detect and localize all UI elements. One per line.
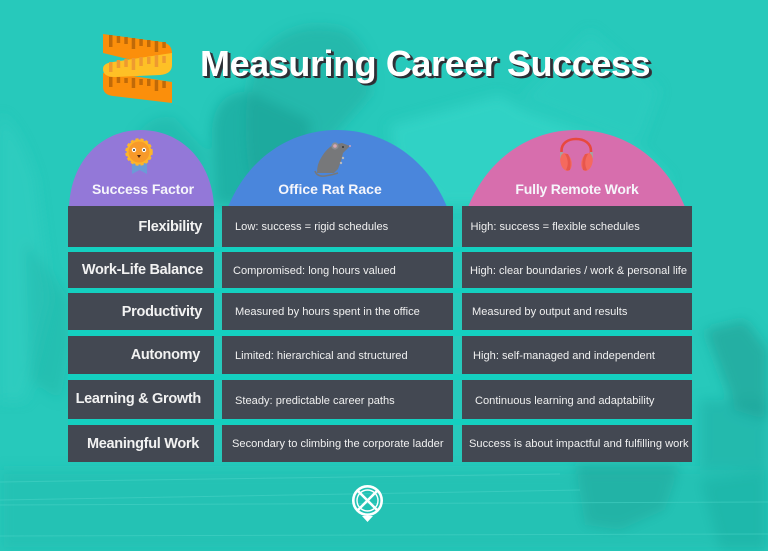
- row: meaningful work office: [222, 425, 453, 462]
- row: flexibility remote: High: success = flexible schedules: [470, 220, 640, 232]
- row: work-life balance office: [222, 252, 453, 288]
- row: work-life balance remote: High: clear boundaries / work & personal life: [470, 264, 687, 276]
- panel: fully remote work header: [468, 130, 684, 206]
- row: productivity factor: Productivity: [122, 304, 202, 320]
- row: meaningful work office: Secondary to climbing the corporate ladder: [232, 438, 444, 450]
- row: meaningful work remote: [462, 425, 692, 462]
- heading: fully remote work: Fully Remote Work: [515, 181, 639, 197]
- row: learning and growth remote: [462, 380, 692, 419]
- row: flexibility factor: [68, 206, 214, 247]
- row: productivity remote: [462, 293, 692, 330]
- row: autonomy factor: Autonomy: [131, 347, 200, 363]
- row: productivity remote: Measured by output and results: [472, 306, 627, 318]
- row: productivity office: [222, 293, 453, 330]
- title: Measuring Career Success: [200, 43, 650, 84]
- row: autonomy remote: [462, 336, 692, 374]
- row: autonomy office: [222, 336, 453, 374]
- row: autonomy factor: [68, 336, 214, 374]
- row: learning and growth office: Steady: predictable career paths: [235, 395, 395, 407]
- row: productivity factor: [68, 293, 214, 330]
- row: work-life balance remote: [462, 252, 692, 288]
- icon: medal: [125, 138, 153, 174]
- row: autonomy remote: High: self-managed and independent: [473, 350, 655, 362]
- row: learning and growth factor: [68, 380, 214, 419]
- row: work-life balance factor: Work-Life Balance: [82, 262, 203, 278]
- row: flexibility factor: Flexibility: [138, 218, 202, 234]
- row dividers: [68, 247, 692, 252]
- row: autonomy office: Limited: hierarchical and structured: [235, 350, 408, 362]
- row: meaningful work remote: Success is about impactful and fulfilling work: [469, 438, 689, 450]
- row: flexibility remote: [462, 206, 692, 247]
- row: productivity office: Measured by hours spent in the office: [235, 306, 420, 318]
- row: work-life balance office: Compromised: long hours valued: [233, 264, 396, 276]
- icon: rat: [314, 142, 351, 177]
- icon: headphones: [560, 138, 593, 171]
- icon: logo: [352, 485, 383, 522]
- heading: office rat race: Office Rat Race: [278, 181, 382, 197]
- row: learning and growth factor: Learning & Growth: [76, 391, 201, 407]
- row: meaningful work factor: Meaningful Work: [87, 436, 199, 452]
- row: learning and growth office: [222, 380, 453, 419]
- panel: office rat race header: [228, 130, 446, 206]
- row: learning and growth remote: Continuous learning and adaptability: [475, 395, 654, 407]
- icon: measuring tape: [103, 34, 172, 103]
- row: flexibility office: Low: success = rigid schedules: [235, 220, 388, 232]
- row: work-life balance factor: [68, 252, 214, 288]
- row: flexibility office: [222, 206, 453, 247]
- heading: success factor: Success Factor: [92, 181, 194, 197]
- row: meaningful work factor: [68, 425, 214, 462]
- panel: success factor header: [69, 130, 214, 206]
